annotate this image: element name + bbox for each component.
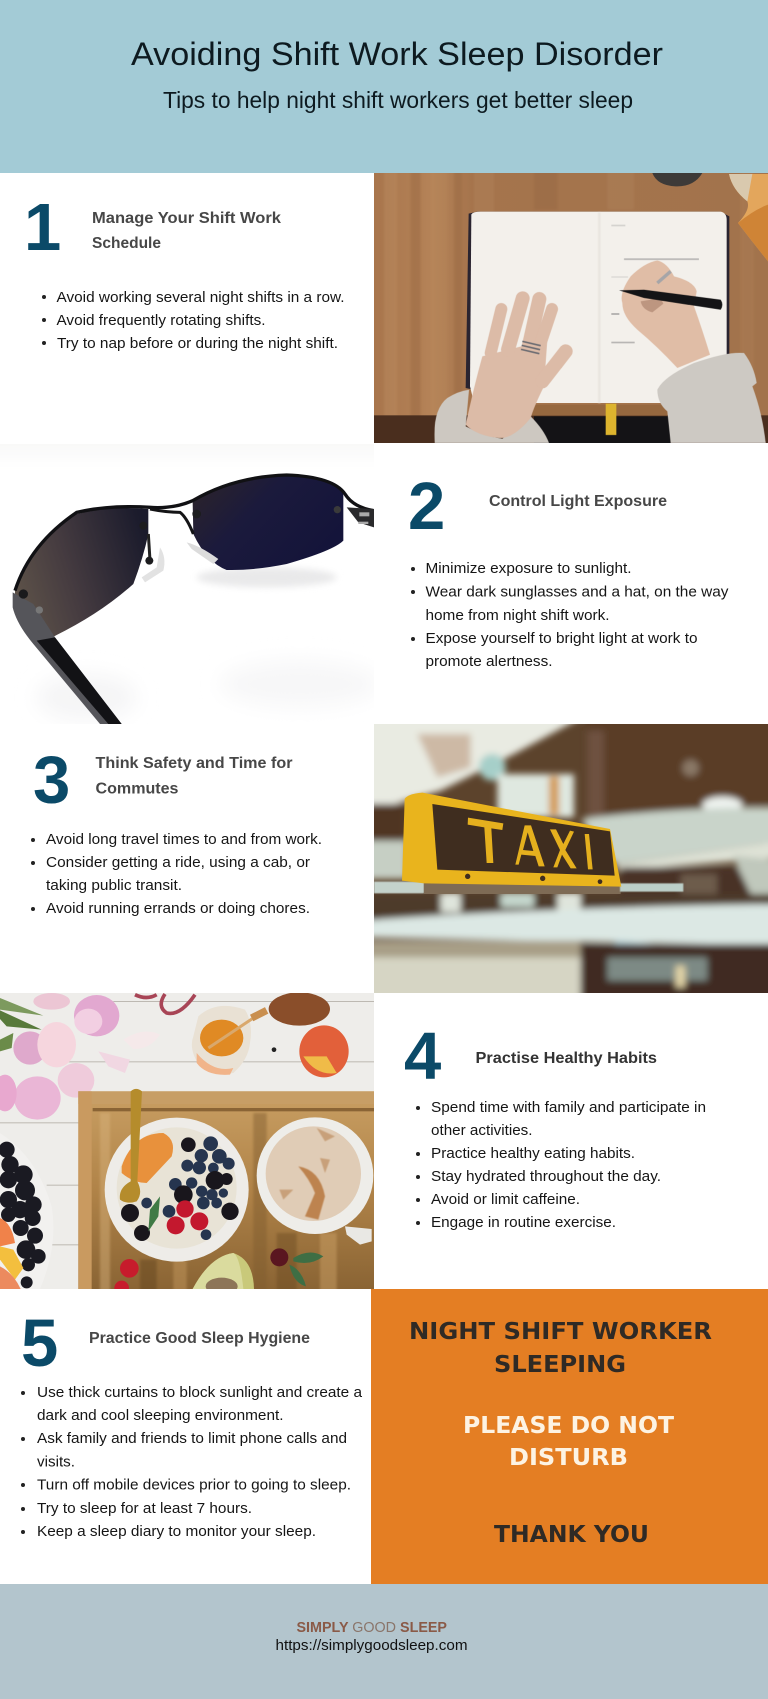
bullet list: step 4: Spend time with family and participate in	[431, 1099, 706, 1116]
avocado	[193, 1253, 254, 1295]
red cord	[135, 994, 195, 1013]
peach	[299, 1025, 349, 1077]
heading: step 1: Schedule	[92, 235, 161, 252]
croissant	[729, 174, 768, 261]
lens right	[193, 476, 343, 570]
photo: sunglasses	[12, 473, 374, 724]
left sleeve	[434, 390, 549, 443]
cup of latte	[257, 1117, 373, 1245]
bullet list: step 2: Minimize exposure to sunlight.	[426, 560, 632, 577]
number 4: 4	[404, 1019, 441, 1094]
TAXI lettering	[468, 818, 593, 869]
heading: step 4: Practise Healthy Habits	[476, 1050, 657, 1067]
pen	[619, 290, 722, 310]
panel: step 4 text	[404, 1019, 706, 1231]
nose pads	[187, 542, 218, 564]
ring	[521, 341, 541, 354]
photo: taxi sign	[374, 724, 768, 993]
bullet list: step 2: promote alertness.	[426, 653, 552, 670]
sign text: night shift worker sleeping: NIGHT SHIFT WORKER	[409, 1319, 712, 1345]
bullet list: step 5: Turn off mobile devices prior to going to sleep.	[37, 1476, 351, 1494]
bullet list: step 4	[416, 1099, 706, 1231]
temple arm	[13, 592, 122, 724]
panel: step 2 text	[408, 469, 729, 670]
bullet list: step 4: Practice healthy eating habits.	[431, 1145, 635, 1162]
title: Avoiding Shift Work Sleep Disorder	[131, 36, 663, 72]
honey jar	[192, 1006, 267, 1075]
bullet list: step 2: home from night shift work.	[426, 607, 610, 624]
right hand	[622, 260, 710, 368]
panel: footer	[0, 1584, 768, 1699]
cutting board	[78, 1091, 374, 1293]
heading: step 3: Commutes	[96, 780, 179, 798]
panel: step 1 text	[0, 173, 374, 444]
number 1: 1	[24, 190, 61, 265]
bullet list: step 1: Avoid working several night shifts in a row.	[56, 289, 344, 306]
bullet list: step 5: visits.	[37, 1454, 75, 1470]
sign text: please do not disturb: PLEASE DO NOT	[463, 1413, 674, 1439]
bullet list: step 2: Expose yourself to bright light at work to	[426, 630, 698, 647]
sign	[402, 793, 621, 887]
bridge	[150, 509, 193, 534]
bullet list: step 4: other activities.	[431, 1122, 532, 1139]
right sleeve	[657, 353, 766, 443]
panel: do not disturb sign	[371, 1289, 768, 1584]
panel: step 3 text	[31, 743, 322, 917]
bullet list: step 3: Avoid long travel times to and from work.	[46, 831, 322, 848]
flowers	[0, 993, 160, 1120]
sign text: thank you: THANK YOU	[494, 1522, 649, 1548]
sign bolts	[465, 874, 602, 884]
lens left	[15, 508, 148, 637]
bullet list: step 1: Try to nap before or during the night shift.	[57, 335, 338, 352]
bullet list: step 4: Engage in routine exercise.	[431, 1214, 616, 1231]
photo: healthy breakfast	[0, 993, 374, 1289]
cup	[652, 173, 702, 186]
spoon	[120, 1089, 142, 1203]
bullet list: step 5: dark and cool sleeping environment.	[37, 1407, 284, 1424]
bullet list: step 1: Avoid frequently rotating shifts.	[56, 312, 266, 329]
loose cherries and leaves	[114, 1248, 323, 1295]
bullet list: step 5: Use thick curtains to block sunlight and create a	[37, 1384, 363, 1401]
heading: step 3: Think Safety and Time for	[96, 755, 292, 772]
plate of berries	[0, 1133, 53, 1289]
bullet list: step 5: Keep a sleep diary to monitor your sleep.	[37, 1523, 316, 1540]
bullet list: step 4: Avoid or limit caffeine.	[431, 1191, 580, 1208]
ribbon	[606, 404, 616, 435]
ring right	[657, 271, 671, 283]
footer brand: SIMPLY GOOD SLEEP	[296, 1620, 447, 1636]
heading: step 2: Control Light Exposure	[489, 493, 667, 510]
left hand	[466, 298, 566, 438]
number 5: 5	[21, 1306, 58, 1381]
tomato	[269, 992, 330, 1026]
bullet list: step 3: Consider getting a ride, using a cab, or	[46, 854, 310, 871]
bowl of oatmeal	[105, 1089, 249, 1262]
sign shadow shelf	[374, 882, 424, 893]
bullet list: step 3	[31, 831, 322, 917]
heading: step 1: Manage Your Shift Work	[92, 210, 281, 227]
panel: step 5 text	[21, 1306, 363, 1540]
heading: step 5: Practice Good Sleep Hygiene	[89, 1330, 310, 1347]
number 3: 3	[33, 743, 70, 818]
frame top	[15, 475, 374, 591]
bullet list: step 4: Stay hydrated throughout the day.	[431, 1168, 661, 1185]
sign text: please do not disturb: DISTURB	[509, 1445, 628, 1471]
bullet list: step 1	[42, 289, 344, 352]
bullet list: step 3: taking public transit.	[46, 877, 182, 894]
bullet list: step 2	[411, 560, 729, 670]
dark table edge	[374, 415, 768, 443]
footer url: https://simplygoodsleep.com	[276, 1637, 468, 1654]
subtitle: Tips to help night shift workers get better sleep	[163, 87, 633, 113]
number 2: 2	[408, 469, 445, 544]
photo: hands writing in notebook	[374, 173, 768, 443]
panel: header	[0, 0, 768, 173]
bullet list: step 2: Wear dark sunglasses and a hat, on the way	[426, 584, 729, 600]
sign text: night shift worker sleeping: SLEEPING	[494, 1352, 626, 1378]
notebook	[466, 212, 729, 403]
bullet list: step 5: Try to sleep for at least 7 hours.	[37, 1500, 252, 1517]
arm right	[347, 507, 374, 527]
bullet list: step 3: Avoid running errands or doing chores.	[46, 900, 310, 917]
bullet list: step 5: Ask family and friends to limit phone calls and	[37, 1430, 347, 1447]
bullet list: step 5	[21, 1384, 363, 1540]
